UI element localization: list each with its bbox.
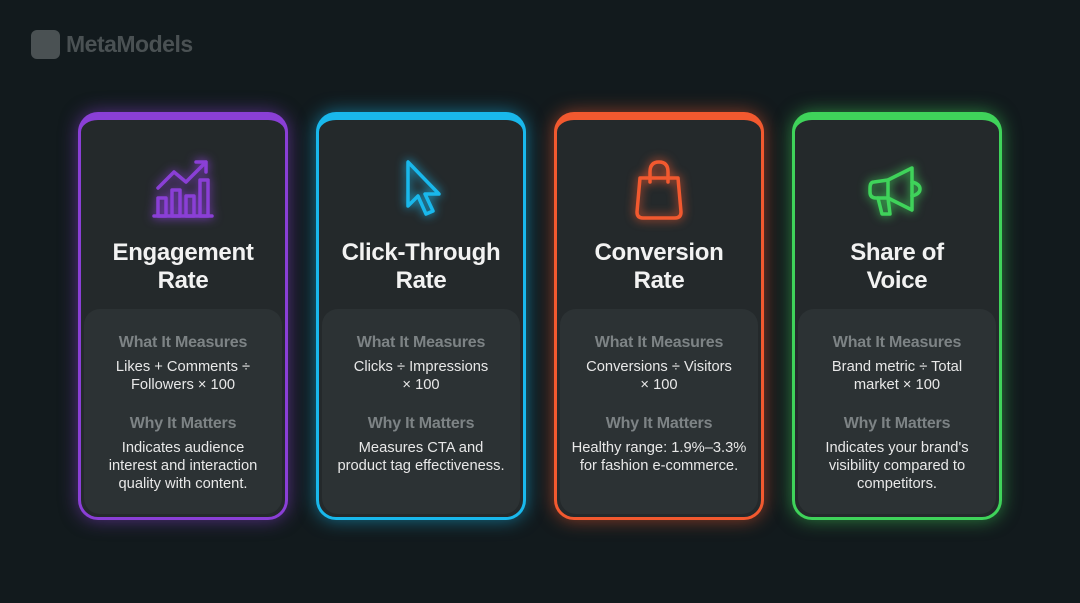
panel: details bbox=[322, 309, 520, 514]
panel: details: Why It Matters bbox=[130, 415, 236, 432]
panel: details: quality with content. bbox=[118, 476, 248, 492]
card: conversion rate bbox=[554, 112, 764, 520]
panel: details: Followers × 100 bbox=[131, 377, 235, 393]
title: Rate bbox=[634, 267, 684, 294]
panel: details: market × 100 bbox=[854, 377, 940, 393]
title: Engagement bbox=[112, 239, 254, 266]
panel: details: interest and interaction bbox=[109, 458, 257, 474]
panel: details: What It Measures bbox=[357, 334, 485, 351]
panel: details: Why It Matters bbox=[844, 415, 950, 432]
panel: details bbox=[560, 309, 758, 514]
panel: details: Brand metric ÷ Total bbox=[832, 359, 962, 375]
title: Share of bbox=[850, 239, 944, 266]
panel: details: What It Measures bbox=[833, 334, 961, 351]
card: click-through rate bbox=[316, 112, 526, 520]
title: Conversion bbox=[594, 239, 724, 266]
panel: details: for fashion e-commerce. bbox=[580, 458, 738, 474]
panel: details: visibility compared to bbox=[829, 458, 965, 474]
title bbox=[594, 239, 724, 294]
card: share of voice bbox=[792, 112, 1002, 520]
panel: details: Why It Matters bbox=[368, 415, 474, 432]
panel: details: Indicates your brand's bbox=[825, 440, 969, 456]
title: Voice bbox=[867, 267, 927, 294]
icon: bar chart bbox=[148, 153, 218, 226]
panel: details: Why It Matters bbox=[606, 415, 712, 432]
panel: details: Clicks ÷ Impressions bbox=[354, 359, 488, 375]
panel: details: What It Measures bbox=[595, 334, 723, 351]
panel: details: product tag effectiveness. bbox=[337, 458, 505, 474]
panel: details: competitors. bbox=[857, 476, 937, 492]
panel: details: What It Measures bbox=[119, 334, 247, 351]
title: Rate bbox=[158, 267, 208, 294]
panel: details: Likes + Comments ÷ bbox=[116, 359, 250, 375]
panel: details: × 100 bbox=[402, 377, 440, 393]
icon: cursor bbox=[398, 155, 446, 222]
panel: details bbox=[84, 309, 282, 514]
logo: MetaModels bbox=[66, 30, 193, 56]
panel: details: Conversions ÷ Visitors bbox=[586, 359, 732, 375]
panel: details: Measures CTA and bbox=[359, 440, 483, 456]
panel: details: Indicates audience bbox=[122, 440, 244, 456]
panel: details bbox=[798, 309, 996, 514]
panel: details: Healthy range: 1.9%–3.3% bbox=[572, 440, 746, 456]
icon: megaphone bbox=[861, 160, 928, 222]
title bbox=[850, 239, 944, 294]
title bbox=[112, 239, 254, 294]
title bbox=[342, 239, 500, 294]
title: Rate bbox=[396, 267, 446, 294]
card: engagement rate bbox=[78, 112, 288, 520]
title: Click-Through bbox=[342, 239, 500, 266]
icon: shopping bag bbox=[628, 153, 690, 228]
panel: details: × 100 bbox=[640, 377, 678, 393]
